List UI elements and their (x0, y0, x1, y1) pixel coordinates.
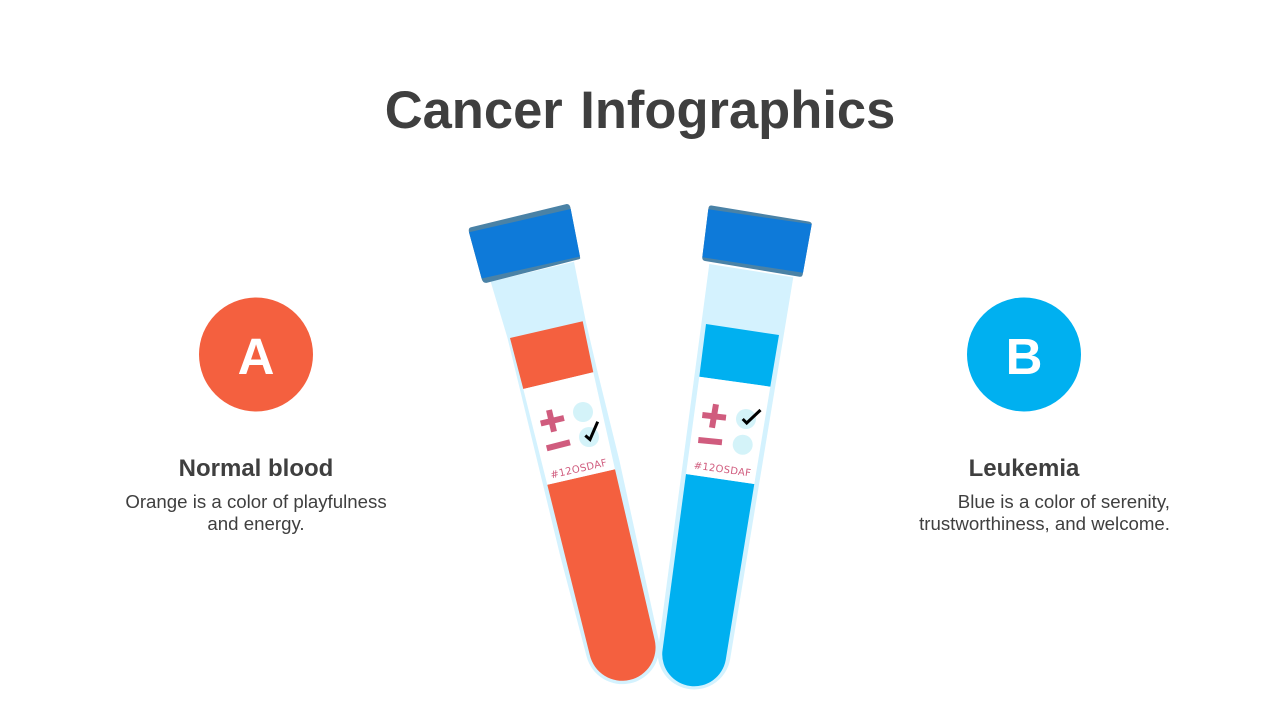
text: leukemia description: Blue is a color of serenity, (958, 491, 1170, 512)
label (523, 372, 615, 485)
lower liquid (547, 469, 656, 681)
panel: normal blood (125, 298, 387, 534)
check mark (585, 422, 598, 440)
text: leukemia description: trustworthiness, and welcome. (919, 513, 1170, 534)
text: normal blood description: and energy. (207, 513, 305, 534)
minus sign (547, 442, 570, 448)
option circle top (573, 402, 593, 422)
heading: normal blood: Normal blood (179, 455, 333, 482)
heading: leukemia: Leukemia (969, 455, 1080, 482)
test tube: blue (658, 205, 812, 689)
label (686, 377, 770, 484)
title: Cancer Infographics (385, 81, 895, 140)
option circle bottom (733, 435, 753, 455)
test tube: orange (469, 204, 659, 684)
cap (469, 204, 580, 283)
panel: leukemia (919, 298, 1170, 534)
check mark (743, 410, 760, 423)
plus sign (702, 404, 726, 428)
plus sign (541, 410, 564, 432)
tube glass (658, 264, 793, 689)
label code: #12OSDAF (693, 461, 752, 479)
minus sign (698, 440, 722, 442)
option circle checked (579, 427, 599, 447)
upper liquid (510, 321, 593, 389)
upper liquid (699, 324, 779, 387)
tube glass (491, 262, 659, 684)
text: normal blood description: Orange is a color of playfulness (125, 491, 387, 512)
badge A (199, 298, 313, 412)
label code: #12OSDAF (550, 458, 608, 481)
option circle checked (736, 409, 756, 429)
badge B (967, 298, 1081, 412)
badge B: B (1006, 328, 1042, 385)
badge A: A (238, 328, 274, 385)
cap (702, 205, 812, 277)
lower liquid (662, 474, 754, 686)
